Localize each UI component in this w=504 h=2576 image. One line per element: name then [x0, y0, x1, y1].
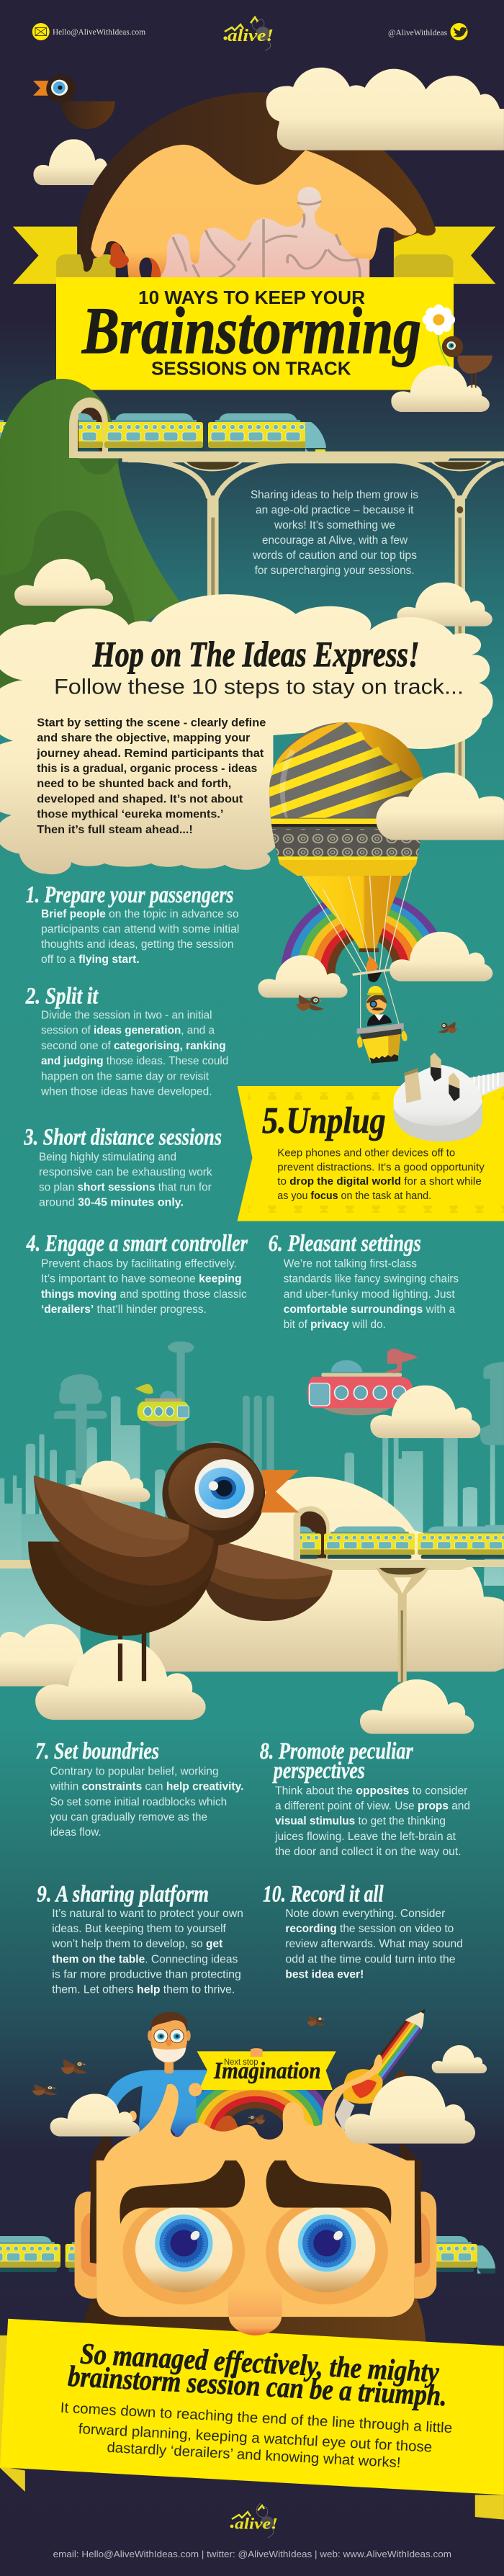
small cloud top left [33, 139, 114, 185]
train nose [305, 422, 326, 454]
deck [72, 452, 504, 462]
heading: 6. Pleasant settings [269, 1231, 421, 1257]
step 8 [260, 1738, 470, 1858]
intro paragraph: for supercharging your sessions. [255, 565, 415, 577]
rear tail [28, 1539, 219, 1635]
red folds [109, 243, 161, 277]
title line 3: SESSIONS ON TRACK [151, 357, 351, 379]
heading: 4. Engage a smart controller [26, 1231, 248, 1257]
body [274, 1785, 470, 1858]
dark gap behind forehead [116, 226, 394, 277]
body: participants can attend with some initial [41, 923, 239, 935]
nose [228, 2288, 282, 2335]
body: Being highly stimulating and [39, 1151, 176, 1163]
skin top of head [104, 2055, 407, 2160]
body: happen on the same day or revisit [41, 1070, 210, 1082]
step 5 text: prevent distractions. It’s a good opportunity [277, 1162, 485, 1174]
pillars [207, 495, 465, 791]
body: juices flowing. Leave the left-brain at [274, 1831, 456, 1843]
step 5 heading: 5.Unplug [262, 1100, 386, 1141]
heading: perspectives [272, 1758, 365, 1784]
burner, pilot and basket [352, 956, 408, 1064]
top right cloud [307, 1349, 480, 1438]
ribbon folds [0, 2335, 504, 2520]
rails [0, 1560, 504, 1570]
tunnel interior [78, 408, 102, 458]
heading: 7. Set boundries [35, 1738, 159, 1764]
email address: Hello@AliveWithIdeas.com [53, 27, 146, 37]
red airship [307, 1349, 418, 1415]
body: review afterwards. What may sound [285, 1938, 463, 1950]
body: It’s natural to want to protect your own [52, 1908, 243, 1920]
logo: alive: alive! [228, 27, 274, 45]
closing ribbon [0, 2319, 504, 2520]
bold intro text [36, 717, 266, 836]
body: session of ideas generation, and a [41, 1025, 215, 1037]
hair sliver left [90, 2160, 422, 2264]
large cloud top right [266, 68, 504, 151]
flower, bird and cloud beside title [391, 305, 492, 412]
subheading: Follow these 10 steps to stay on track... [54, 676, 464, 699]
step 5 text: as you focus on the task at hand. [277, 1190, 431, 1202]
yellow airship [135, 1384, 189, 1427]
body: best idea ever! [285, 1968, 364, 1980]
logo: alive [223, 16, 274, 50]
side hair strips [90, 2160, 421, 2263]
body: bit of privacy will do. [284, 1319, 386, 1331]
intro paragraph: words of caution and our top tips [252, 549, 417, 562]
heading [260, 1738, 414, 1784]
body [41, 908, 239, 966]
bold intro text: developed and shaped. It’s not about [37, 793, 243, 805]
cloud beside balloon [376, 773, 504, 840]
small birds [32, 2015, 325, 2124]
step 9 [37, 1881, 243, 1996]
body: and judging those ideas. These could [41, 1055, 228, 1067]
panel: step 5 banner [238, 1053, 504, 1221]
icon: twitter [451, 23, 468, 40]
small bird [442, 336, 492, 387]
left train [0, 2236, 495, 2274]
clouds and birds by rainbow [258, 932, 492, 1033]
big face [0, 2160, 495, 2346]
large cloud [150, 1477, 504, 1671]
hand on left [129, 2111, 137, 2122]
ears [75, 2191, 436, 2299]
bold intro text: Then it’s full steam ahead...! [37, 824, 193, 836]
heading: 9. A sharing platform [37, 1881, 209, 1907]
flower [423, 305, 455, 366]
heading: 8. Promote peculiar [260, 1738, 414, 1764]
bold intro text: journey ahead. Remind participants that [36, 748, 264, 760]
bird top left [33, 74, 115, 129]
heading: 2. Split it [25, 983, 99, 1009]
body: So set some initial roadblocks which [50, 1796, 227, 1808]
body: second one of categorising, ranking [41, 1040, 226, 1052]
tree [0, 379, 181, 691]
step 6 [269, 1231, 459, 1331]
clouds behind main cloud [14, 559, 492, 627]
twitter handle: @AliveWithIdeas [388, 27, 447, 37]
footer logo: alive! [235, 2515, 278, 2532]
train cars [104, 413, 203, 453]
body [41, 1257, 247, 1316]
hot air balloon [267, 722, 428, 1064]
eyes [135, 2207, 375, 2292]
body [39, 1151, 212, 1209]
body: won’t help them to develop, so get [51, 1938, 222, 1950]
cloud under bird [391, 365, 490, 412]
cloud behind bird [64, 1460, 150, 1502]
intro paragraph: works! It’s something we [274, 519, 395, 531]
step 5 text [277, 1147, 485, 1202]
closing text: It comes down to reaching the end of the line through a little [60, 2400, 453, 2436]
body: Think about the opposites to consider [275, 1785, 467, 1798]
viaduct [72, 452, 504, 791]
next stop label: Next stop [224, 2057, 258, 2067]
ribbon tails [13, 227, 495, 287]
title line 1: 10 WAYS TO KEEP YOUR [138, 287, 365, 308]
side hair [91, 2132, 418, 2160]
body: so plan short sessions that run for [39, 1181, 212, 1194]
body [284, 1257, 459, 1331]
body: when those ideas have developed. [40, 1086, 212, 1098]
body [51, 1908, 243, 1996]
yellow flag [238, 1086, 504, 1221]
body: Brief people on the topic in advance so [41, 908, 239, 920]
step 7 [35, 1738, 243, 1839]
main heading: Hop on The Ideas Express! [92, 634, 420, 674]
city scene [0, 1342, 504, 1687]
imagination scene [32, 2004, 487, 2160]
beard [84, 2288, 426, 2346]
carriages [300, 1527, 504, 1559]
intro paragraph: an age-old practice – because it [256, 504, 414, 516]
bold intro text: and share the objective, mapping your [37, 732, 250, 744]
heading: 10. Record it all [263, 1881, 384, 1907]
step 4 [26, 1231, 248, 1316]
closing text: forward planning, keeping a watchful eye out for those [78, 2421, 433, 2456]
body: Contrary to popular belief, working [50, 1766, 218, 1778]
legs [118, 1633, 146, 1681]
body: things moving and spotting those classic [41, 1288, 247, 1301]
bold intro text: Start by setting the scene - clearly define [37, 717, 266, 729]
title banner [56, 277, 454, 390]
body: around 30-45 minutes only. [39, 1197, 184, 1209]
closing heading: So managed effectively, the mighty [79, 2337, 441, 2389]
left wing [34, 1476, 214, 1586]
body: ideas flow. [50, 1826, 102, 1839]
brain [160, 187, 369, 277]
flame and brush tip [343, 2069, 383, 2104]
body: We’re not talking first-class [284, 1257, 417, 1270]
eye [195, 1459, 254, 1518]
clouds [50, 2045, 487, 2144]
bold intro text: need to be shunted back and forth, [37, 778, 231, 790]
body: It’s important to have someone keeping [41, 1273, 242, 1285]
body: ideas. But keeping them to yourself [52, 1923, 227, 1935]
body: the door and collect it on the way out. [275, 1846, 461, 1858]
eye sockets [123, 2199, 388, 2305]
left rail [0, 452, 8, 459]
train inside tunnel [78, 413, 103, 452]
step 2 [25, 983, 228, 1098]
step 3 [24, 1125, 222, 1209]
title banner tails and head with brain [13, 92, 495, 287]
far skyline [54, 1342, 504, 1484]
icon: email [32, 23, 50, 40]
bottom right cloud [360, 1679, 474, 1734]
brackets [181, 461, 492, 471]
dotted rows [248, 1092, 504, 1213]
sign: next stop [189, 2048, 336, 2096]
footer contact line: email: Hello@AliveWithIdeas.com | twitter: @AliveWithIdeas | web: www.AliveWithIdeas.com [53, 2549, 451, 2559]
bold intro text: those mythical ‘eureka moments.’ [37, 808, 223, 820]
footer logo [230, 2503, 278, 2538]
body: Prevent chaos by facilitating effectively. [41, 1257, 237, 1270]
heading: 3. Short distance sessions [24, 1125, 222, 1151]
title main word: Brainstorming [81, 294, 421, 367]
imagination label: Imagination [213, 2058, 321, 2084]
red lump [214, 2116, 240, 2137]
arches [122, 459, 504, 498]
intro paragraph: encourage at Alive, with a few [262, 534, 408, 547]
body [285, 1908, 463, 1980]
rainbow [179, 2069, 333, 2137]
right wing [206, 1539, 333, 1621]
closing text: dastardly ‘derailers’ and knowing what works! [107, 2440, 401, 2471]
left train fragment [0, 413, 10, 453]
body: a different point of view. Use props and [275, 1800, 470, 1812]
ribbon main [0, 2319, 504, 2495]
body: responsive can be exhausting work [39, 1167, 212, 1178]
body: comfortable surroundings with a [284, 1303, 456, 1316]
beak [261, 1470, 299, 1512]
body: Divide the session in two - an initial [41, 1010, 212, 1022]
man body [107, 2012, 236, 2137]
body: you can gradually remove as the [50, 1811, 207, 1823]
main cloud panel [0, 594, 493, 874]
head [162, 1443, 265, 1545]
step 1 [26, 882, 239, 966]
body: thoughts and ideas, getting the session [41, 938, 233, 951]
balloon funnel and ropes [297, 864, 413, 973]
tree, train and tunnel [0, 379, 326, 691]
bold intro text: this is a gradual, organic process - ideas [37, 763, 258, 775]
body: standards like fancy swinging chairs [284, 1273, 459, 1285]
body: ‘derailers’ that’ll hinder progress. [41, 1303, 207, 1316]
heading: 1. Prepare your passengers [26, 882, 233, 908]
closing heading [67, 2337, 448, 2412]
icon: plug [394, 1053, 504, 1141]
cloud lower left [0, 1624, 84, 1687]
hair dome [77, 92, 436, 271]
tunnel arch [69, 398, 108, 458]
body: them on the table. Connecting ideas [52, 1953, 238, 1965]
pencil rocket [359, 2004, 433, 2091]
body: off to a flying start. [41, 953, 140, 966]
step 10 [263, 1881, 463, 1980]
body: and uber-funky mood lighting. Just [284, 1288, 455, 1301]
bridge support [376, 1568, 429, 1682]
tree shadows [0, 455, 135, 686]
body: odd at the time could turn into the [285, 1953, 456, 1965]
hair knob on right [393, 2070, 406, 2083]
body [50, 1766, 243, 1839]
nose over ribbon [229, 2317, 282, 2335]
body [40, 1010, 228, 1098]
forehead skin [91, 145, 416, 277]
intro paragraph [251, 489, 418, 577]
tunnel [294, 1507, 330, 1562]
body: them. Let others help them to thrive. [52, 1983, 235, 1996]
intro paragraph: Sharing ideas to help them grow is [251, 489, 418, 501]
legs over cloud [118, 1635, 146, 1681]
body: recording the session on video to [285, 1923, 454, 1935]
balloon envelope [267, 722, 428, 879]
step 5 text: to drop the digital world for a short while [277, 1175, 482, 1188]
big bird [28, 1443, 474, 1734]
rainbow behind balloon [285, 894, 445, 974]
lower train [0, 1507, 504, 1682]
header contact bar [32, 16, 467, 50]
eyebrows [120, 2160, 391, 2224]
body: is far more productive than protecting [52, 1968, 241, 1980]
body: visual stimulus to get the thinking [275, 1816, 446, 1828]
body: Note down everything. Consider [285, 1908, 445, 1920]
face [96, 2160, 415, 2317]
near skyline [0, 1396, 504, 1643]
body: within constraints can help creativity. [50, 1781, 243, 1793]
step 5 text: Keep phones and other devices off to [277, 1147, 455, 1159]
cloud under bird [35, 1639, 206, 1720]
closing text [60, 2400, 453, 2471]
